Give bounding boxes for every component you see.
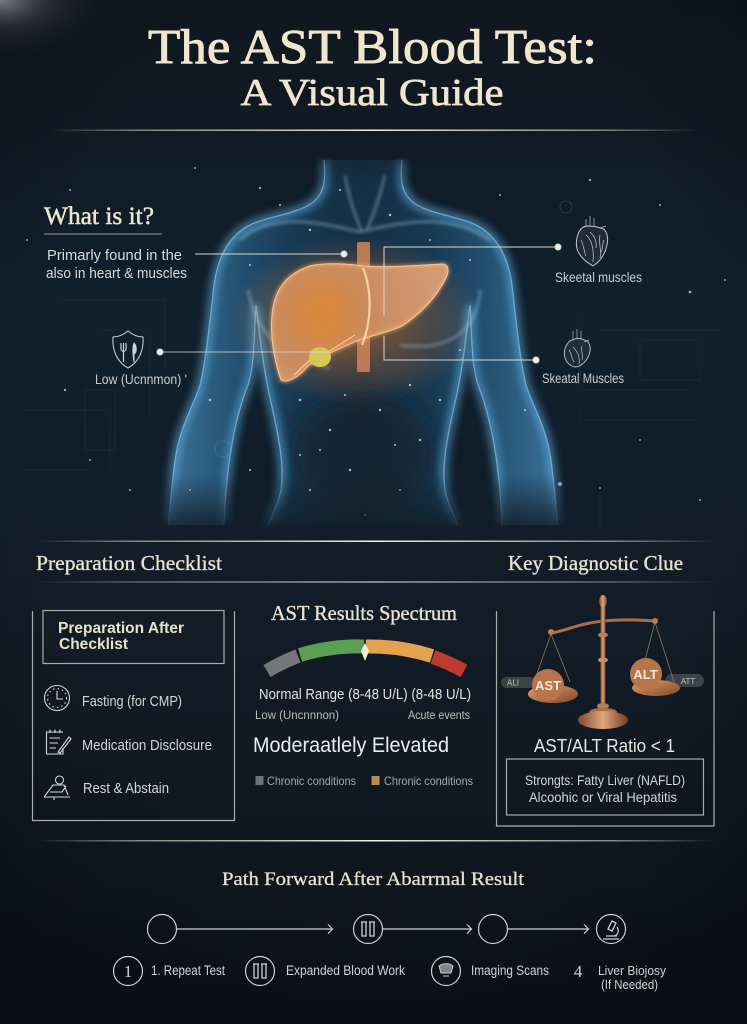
gauge range label: Normal Range (8-48 U/L) (8-48 U/L) <box>259 686 471 703</box>
section divider <box>35 540 715 542</box>
step 3: Imaging Scans <box>471 963 549 978</box>
icon: person resting <box>44 776 70 800</box>
spine bar <box>357 242 370 372</box>
item: rest: Rest & Abstain <box>83 781 169 797</box>
pathway flow with arrows <box>148 914 626 944</box>
panel: what is it <box>44 203 187 282</box>
conditions box: Alcoohic or Viral Hepatitis <box>529 789 677 805</box>
callout lines <box>157 244 561 363</box>
description text <box>46 247 187 282</box>
step 2: Expanded Blood Work <box>286 963 405 978</box>
label: skeletal muscles lower: Skeatal Muscles <box>542 370 624 386</box>
heading: what is it: What is it? <box>44 203 154 230</box>
title: The AST Blood Test: <box>148 19 597 74</box>
title divider <box>50 130 697 131</box>
label: low uncommon: Low (Ucnnmon) ' <box>95 371 187 387</box>
gauge chart <box>267 643 464 671</box>
step 2 <box>246 956 405 986</box>
step 1: 1 <box>124 962 132 981</box>
label: skeletal muscles top: Skeetal muscles <box>555 269 642 285</box>
scale pills: ATT <box>681 677 695 686</box>
section sub divider <box>35 582 715 583</box>
icon: shield with fork and knife <box>113 331 143 368</box>
item: fasting: Fasting (for CMP) <box>82 694 182 710</box>
icon: heart top right <box>576 216 608 266</box>
title <box>148 19 597 114</box>
icon: clipboard <box>46 730 71 754</box>
legend <box>256 774 473 788</box>
heading: key diagnostic clue: Key Diagnostic Clue <box>508 551 683 575</box>
icon: microscope <box>603 921 619 939</box>
result label: Moderaatlely Elevated <box>253 734 449 757</box>
conditions box: Strongts: Fatty Liver (NAFLD) <box>525 772 685 788</box>
legend: Chronic conditions <box>384 774 473 788</box>
step 3 <box>432 956 549 986</box>
box heading: Checklist <box>59 636 128 653</box>
box heading <box>43 610 224 664</box>
icon: test tubes top <box>361 922 375 936</box>
step 4: 4 <box>574 962 583 981</box>
human body illustration <box>168 160 558 525</box>
step 1: 1. Repeat Test <box>151 963 225 978</box>
panel: AST results spectrum <box>253 601 473 788</box>
legend: Chronic conditions <box>267 774 356 788</box>
description text: Primarly found in the <box>47 247 182 264</box>
box heading: Preparation After <box>58 620 184 637</box>
gallbladder <box>309 347 331 367</box>
heading: preparation checklist: Preparation Checklist <box>36 551 222 575</box>
gauge low label: Low (Uncnnnon) <box>255 710 339 722</box>
panel: path forward <box>114 869 666 992</box>
title: A Visual Guide <box>240 72 504 114</box>
icon: balance scale <box>501 595 704 729</box>
ratio label: AST/ALT Ratio < 1 <box>534 736 675 756</box>
conditions box <box>506 759 704 815</box>
liver illustration <box>230 235 480 405</box>
description text: also in heart & muscles <box>46 265 187 282</box>
heading: AST results spectrum: AST Results Spectrum <box>271 601 457 625</box>
icon: heart lower right <box>564 329 590 367</box>
step 4 <box>574 962 666 992</box>
scale pills <box>501 674 704 688</box>
heading: path forward: Path Forward After Abarrmal Result <box>222 869 525 890</box>
panel: preparation checklist <box>32 610 234 820</box>
panel: key diagnostic clue <box>496 595 714 826</box>
section divider lower <box>35 840 715 842</box>
gauge acute label: Acute events <box>408 710 470 722</box>
step 4: Liver Biojosy <box>598 963 666 978</box>
decorative circuit background and stars <box>20 167 726 530</box>
step 1 <box>114 956 225 986</box>
icon: clock <box>44 686 70 710</box>
icon: balance scale: AST <box>535 678 561 693</box>
icon: balance scale: ALT <box>633 667 658 682</box>
step 4: (If Needed) <box>601 977 658 992</box>
item: medication: Medication Disclosure <box>82 738 212 754</box>
scale pills: ALI <box>507 678 519 688</box>
